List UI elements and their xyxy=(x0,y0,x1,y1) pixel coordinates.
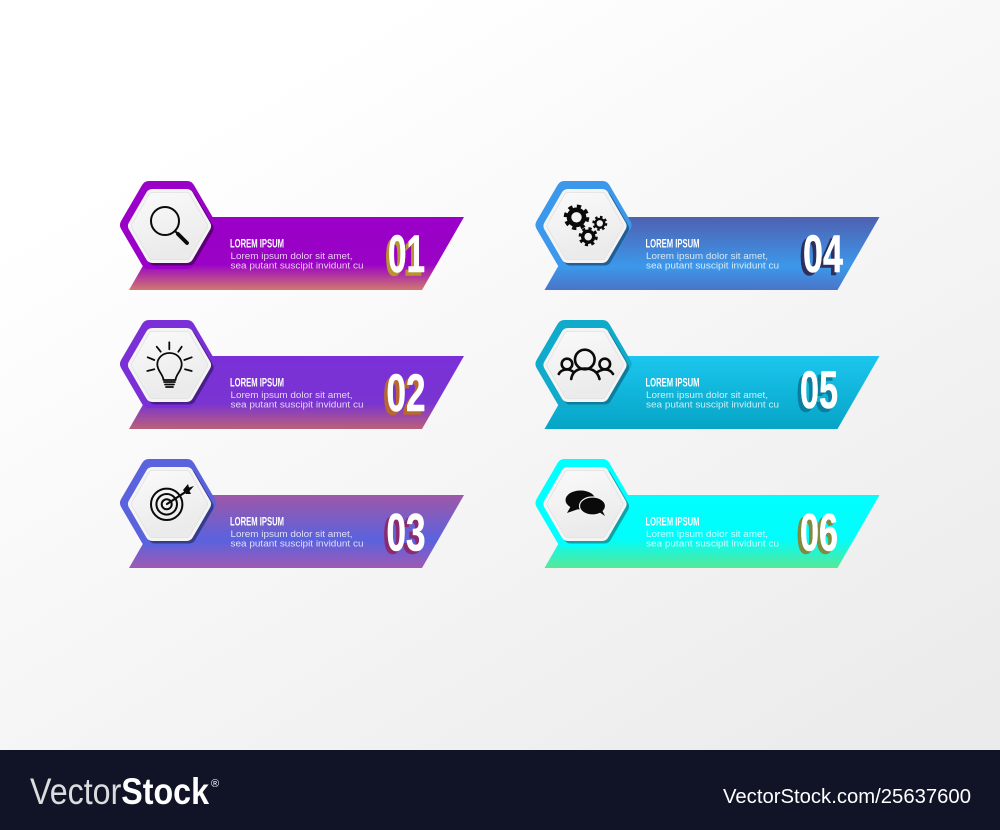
footer image id: VectorStock.com/25637600 xyxy=(723,786,971,808)
text: item 06: sea putant suscipit invidunt cu xyxy=(646,538,779,548)
icon: magnifier xyxy=(151,207,187,243)
number 03: 03 xyxy=(383,506,422,566)
number 03: 03 xyxy=(386,504,426,562)
text: item 01 xyxy=(230,238,364,270)
panel: item 06 xyxy=(544,467,880,568)
panel: item 01 xyxy=(128,189,464,290)
text: item 03: sea putant suscipit invidunt cu xyxy=(230,538,364,548)
number 03 xyxy=(383,504,426,566)
text: item 02 xyxy=(230,378,364,410)
text: item 01: sea putant suscipit invidunt cu xyxy=(230,260,364,270)
number 05 xyxy=(796,361,838,424)
hexagon badge 02 xyxy=(128,328,208,400)
number 02: 02 xyxy=(386,364,426,423)
number 04: 04 xyxy=(803,225,843,284)
number 06 xyxy=(796,504,838,566)
hexagon badge 04 xyxy=(544,189,624,261)
text: item 05: LOREM IPSUM xyxy=(646,378,700,390)
text: item 05: sea putant suscipit invidunt cu xyxy=(646,400,779,410)
hexagon badge 01 xyxy=(128,189,208,261)
hexagon badge 03 xyxy=(128,467,208,539)
ribbon 06 xyxy=(544,495,880,568)
number 05: 05 xyxy=(796,364,834,424)
text: item 03 xyxy=(230,516,364,548)
text: item 02: LOREM IPSUM xyxy=(230,378,284,390)
number 06: 06 xyxy=(796,506,834,566)
text: item 04 xyxy=(646,238,779,270)
panel: item 04 xyxy=(544,189,880,290)
ribbon 01 xyxy=(129,217,464,290)
ribbon 02 xyxy=(129,356,464,429)
number 01: 01 xyxy=(385,228,422,288)
text: item 04: Lorem ipsum dolor sit amet, xyxy=(646,251,768,261)
footer bar xyxy=(0,750,1000,830)
icon: gears xyxy=(566,206,606,245)
number 06: 06 xyxy=(800,504,838,562)
number 02 xyxy=(383,364,426,426)
ribbon 04 xyxy=(544,217,880,290)
number 02: 02 xyxy=(383,368,422,426)
panel: item 02 xyxy=(128,328,464,429)
footer logo: VectorStock xyxy=(30,771,209,812)
icon: target with arrow xyxy=(151,484,194,520)
ribbon 05 xyxy=(544,356,880,429)
text: item 05 xyxy=(646,378,779,410)
text: item 01: Lorem ipsum dolor sit amet, xyxy=(230,251,352,261)
hexagon badge 06 xyxy=(544,467,624,539)
hexagon badge 05 xyxy=(544,328,624,400)
ribbon 03 xyxy=(129,495,464,568)
number 05: 05 xyxy=(800,361,838,420)
number 01: 01 xyxy=(388,225,425,284)
icon: chat bubbles xyxy=(566,490,606,516)
text: item 03: Lorem ipsum dolor sit amet, xyxy=(230,529,352,539)
icon: light bulb xyxy=(147,342,192,387)
panel: item 05 xyxy=(544,328,880,429)
text: item 02: Lorem ipsum dolor sit amet, xyxy=(230,390,352,400)
registered mark: ® xyxy=(211,778,219,790)
text: item 06 xyxy=(646,516,779,548)
number 04: 04 xyxy=(800,228,840,287)
text: item 04: LOREM IPSUM xyxy=(646,238,700,250)
panel: item 03 xyxy=(128,467,464,568)
text: item 06: LOREM IPSUM xyxy=(646,516,700,528)
text: item 03: LOREM IPSUM xyxy=(230,516,284,528)
number 01 xyxy=(385,225,425,288)
text: item 04: sea putant suscipit invidunt cu xyxy=(646,260,779,270)
text: item 02: sea putant suscipit invidunt cu xyxy=(230,400,364,410)
icon: group of people xyxy=(559,350,613,379)
text: item 06: Lorem ipsum dolor sit amet, xyxy=(646,529,768,539)
text: item 01: LOREM IPSUM xyxy=(230,238,284,250)
text: item 05: Lorem ipsum dolor sit amet, xyxy=(646,390,768,400)
